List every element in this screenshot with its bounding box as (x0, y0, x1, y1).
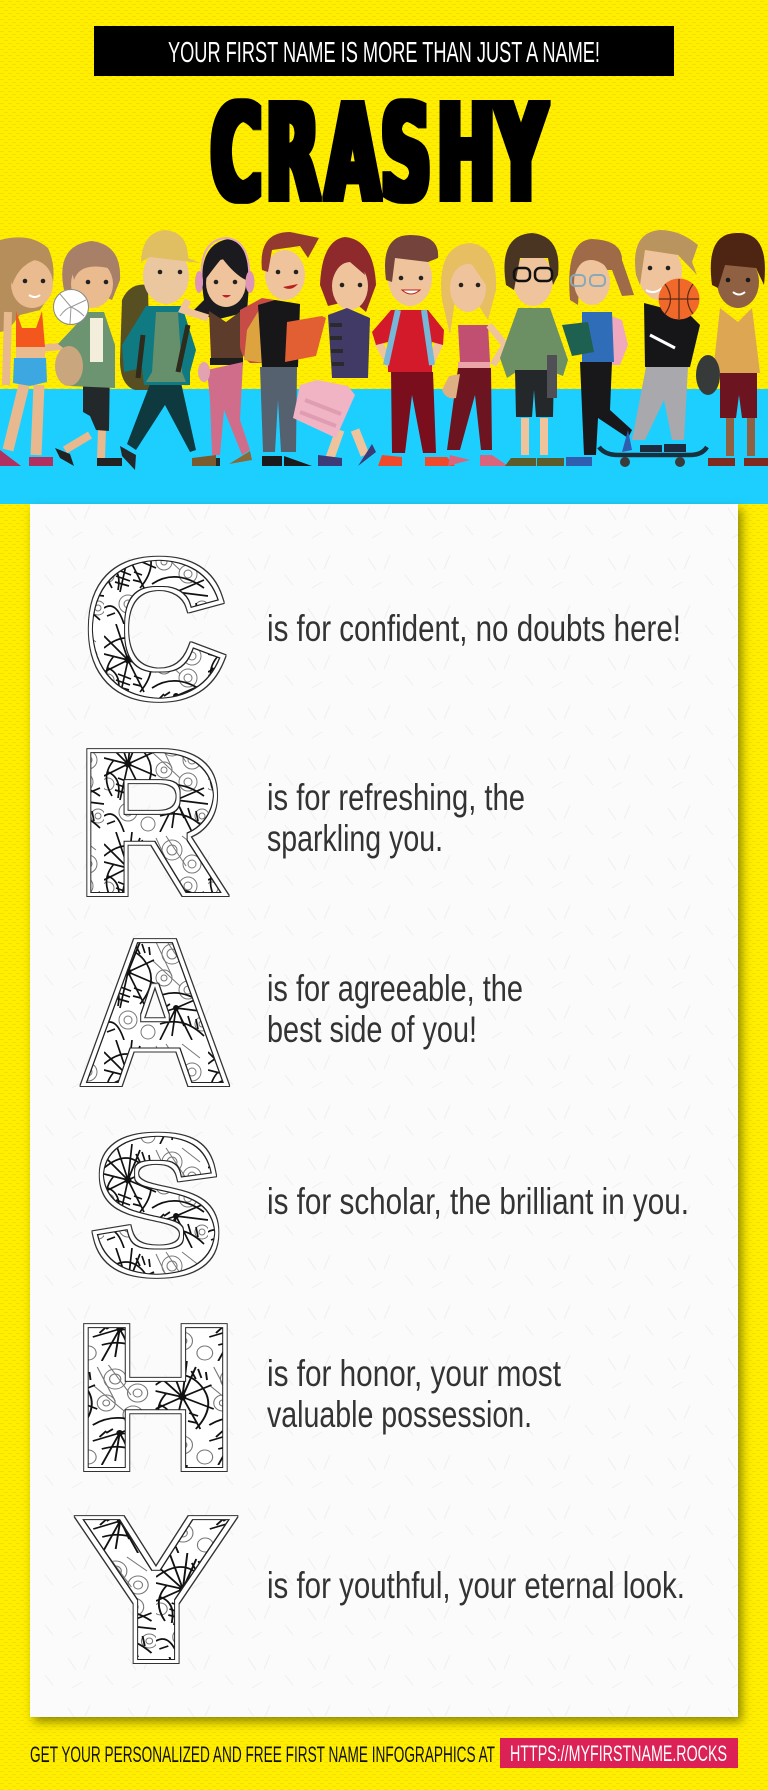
icon: decorative letter Y: Y (83, 1481, 229, 1699)
text: R lines: is for refreshing, the (267, 777, 525, 818)
footer text: GET YOUR PERSONALIZED AND FREE FIRST NAME INFOGRAPHICS AT (30, 1742, 495, 1767)
row: letter A (84, 903, 523, 1122)
person 10: girl with pink backpack and tablet (562, 239, 634, 466)
person 1: girl in orange top (0, 237, 78, 466)
person 9: boy with glasses in green sweater (500, 233, 568, 466)
illustration: group of twelve young people (0, 230, 768, 470)
icon: pink handbag (293, 380, 355, 438)
icon: decorative letter R: R (80, 713, 222, 932)
text: A lines: best side of you! (267, 1009, 477, 1050)
main white panel (30, 504, 738, 1717)
row: letter S (94, 1100, 689, 1310)
row: letter Y (83, 1481, 685, 1699)
text: H lines: is for honor, your most (267, 1353, 562, 1394)
text: A lines (267, 968, 523, 1050)
person 3: boy with cap and backpack (120, 230, 220, 470)
icon: basketball (658, 278, 700, 320)
icon: decorative letter S: S (94, 1100, 220, 1310)
row: letter H (76, 1289, 562, 1507)
person 5: boy with book (240, 232, 326, 466)
person 2: girl with volleyball (54, 241, 122, 466)
person 11: boy on skateboard with basketball (599, 230, 707, 467)
icon: decorative letter C: C (87, 524, 223, 734)
text: H lines: valuable possession. (267, 1394, 532, 1435)
person 7: boy in red shirt (372, 235, 455, 466)
icon: decorative letter H: H (76, 1289, 235, 1507)
text: R lines: sparkling you. (267, 818, 443, 859)
person 12: boy in tan tank top (696, 233, 768, 466)
person 8: blonde girl (441, 243, 508, 466)
row: letter R (80, 713, 525, 932)
person 6: girl with pink bag (293, 237, 376, 466)
icon: skateboard (599, 447, 707, 467)
text: R lines (267, 777, 525, 859)
top banner (94, 26, 674, 76)
title: CRASHY: CRASHY (211, 77, 547, 231)
footer (30, 1738, 738, 1768)
icon: decorative letter A: A (84, 903, 226, 1122)
text: A lines: is for agreeable, the (267, 968, 523, 1009)
text: H lines (267, 1353, 562, 1435)
person 4: girl with headphones (183, 238, 254, 466)
cyan floor band (0, 389, 768, 504)
icon: volleyball (54, 290, 88, 324)
row: letter C (87, 524, 681, 734)
